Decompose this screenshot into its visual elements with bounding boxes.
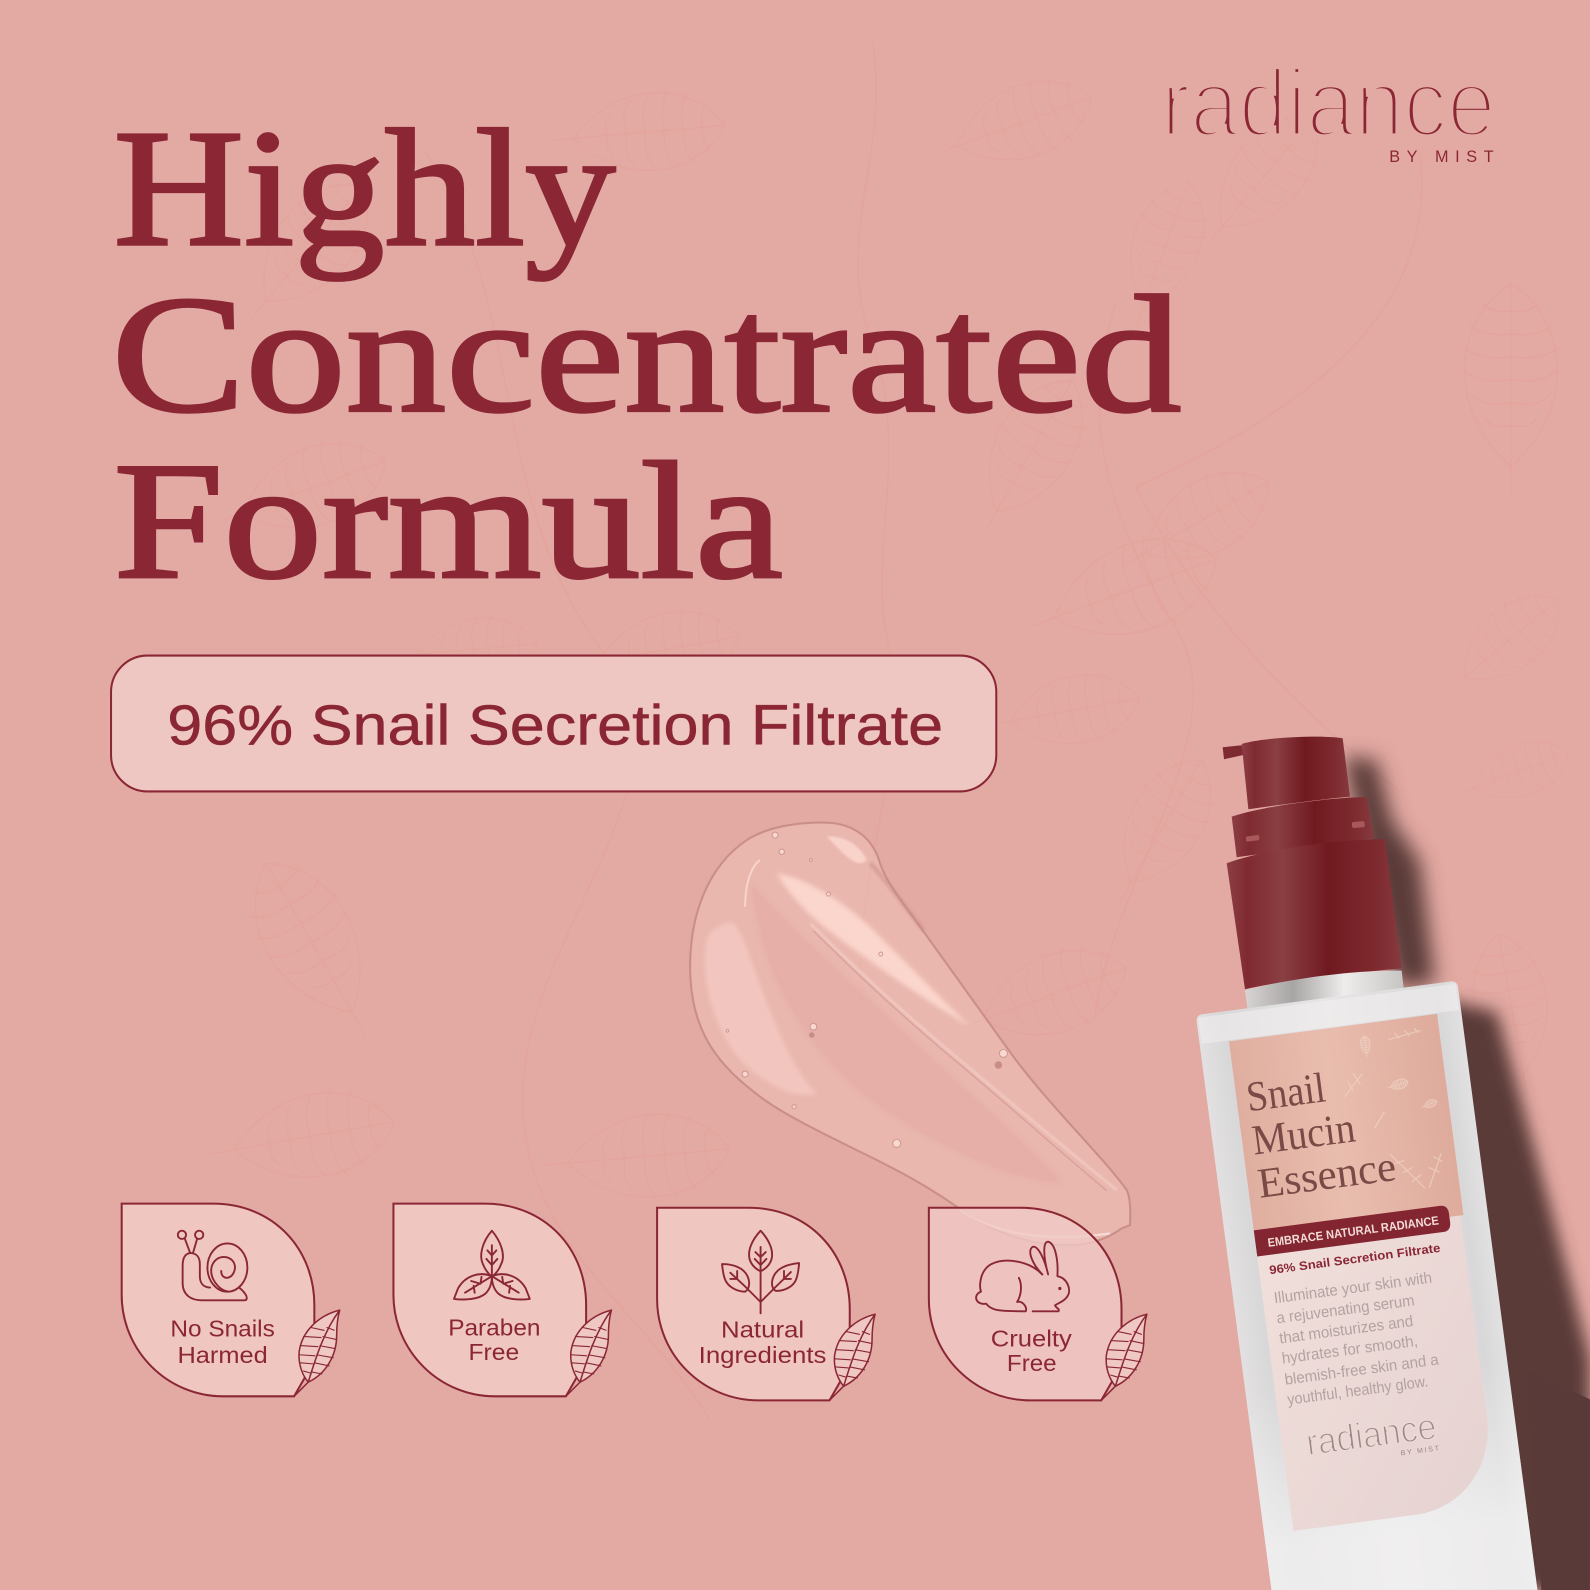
pump collar xyxy=(1227,839,1402,989)
icon: snail xyxy=(178,1231,247,1300)
pill text: 96% Snail Secretion Filtrate xyxy=(167,694,943,757)
label band text: EMBRACE NATURAL RADIANCE xyxy=(1267,1213,1440,1250)
title line: Highly: Highly xyxy=(114,96,616,281)
label: cruelty free: Cruelty xyxy=(991,1326,1072,1352)
label description: that moisturizes and xyxy=(1278,1313,1414,1347)
icon: three leaves xyxy=(454,1231,530,1299)
label title: Snail xyxy=(1244,1064,1328,1121)
label description: hydrates for smooth, xyxy=(1281,1333,1419,1368)
label description: blemish-free skin and a xyxy=(1284,1352,1440,1389)
label subtitle: 96% Snail Secretion Filtrate xyxy=(1268,1241,1441,1277)
label: paraben free: Free xyxy=(468,1339,519,1365)
pump head xyxy=(1242,737,1350,809)
product bottle xyxy=(1196,981,1537,1590)
gel bubbles xyxy=(726,832,1007,1147)
card: paraben free xyxy=(393,1204,611,1396)
bottle shadow xyxy=(1343,757,1590,1590)
icon: corner leaf xyxy=(829,1314,875,1400)
label: natural ingredients xyxy=(699,1317,826,1368)
icon: corner leaf xyxy=(566,1310,611,1396)
label: cruelty free xyxy=(991,1326,1072,1376)
pump assembly xyxy=(1223,737,1405,1017)
title: Highly Concentrated Formula xyxy=(112,96,1181,614)
bottle body xyxy=(1196,981,1537,1590)
label: no snails harmed: No Snails xyxy=(170,1315,275,1341)
label description xyxy=(1273,1270,1446,1409)
label: no snails harmed xyxy=(170,1315,275,1368)
pill: 96% snail secretion filtrate xyxy=(111,656,996,791)
label description: a rejuvenating serum xyxy=(1276,1292,1416,1327)
card: no snails harmed xyxy=(122,1204,340,1396)
label lower panel xyxy=(1255,1214,1498,1531)
gel swatch xyxy=(690,823,1130,1245)
label leaf decorations xyxy=(1337,1026,1449,1197)
icon: sprout xyxy=(722,1231,799,1313)
icon: rabbit xyxy=(976,1242,1069,1311)
label: cruelty free: Free xyxy=(1007,1350,1057,1376)
title line: Concentrated: Concentrated xyxy=(112,263,1181,448)
label band xyxy=(1254,1205,1451,1256)
background leaf pattern xyxy=(203,41,1578,1420)
label title: Mucin xyxy=(1249,1104,1358,1165)
title line: Formula: Formula xyxy=(114,429,783,614)
bottle label xyxy=(1229,1014,1501,1531)
label logo: radiance xyxy=(1304,1406,1439,1463)
logo wordmark: radiance xyxy=(1161,51,1496,157)
label: natural ingredients: Natural xyxy=(721,1317,804,1343)
card: cruelty free xyxy=(929,1208,1147,1400)
label peach panel xyxy=(1229,1014,1463,1242)
label: paraben free: Paraben xyxy=(448,1314,540,1340)
pump ring xyxy=(1232,797,1374,857)
card: natural ingredients xyxy=(657,1208,875,1400)
label logo subline: BY MIST xyxy=(1400,1444,1440,1457)
logo subline: BY MIST xyxy=(1389,148,1494,166)
label description: youthful, healthy glow. xyxy=(1286,1373,1429,1409)
label title: Essence xyxy=(1255,1143,1399,1208)
label: no snails harmed: Harmed xyxy=(177,1342,268,1368)
label title xyxy=(1244,1057,1399,1208)
brand logo: radiance by mist xyxy=(1161,51,1496,166)
nozzle xyxy=(1223,745,1243,759)
icon: corner leaf xyxy=(294,1310,340,1396)
label: paraben free xyxy=(448,1314,540,1365)
label: natural ingredients: Ingredients xyxy=(699,1342,826,1368)
label description: Illuminate your skin with xyxy=(1273,1270,1433,1307)
bottle neck xyxy=(1245,971,1405,1017)
icon: corner leaf xyxy=(1101,1314,1147,1400)
